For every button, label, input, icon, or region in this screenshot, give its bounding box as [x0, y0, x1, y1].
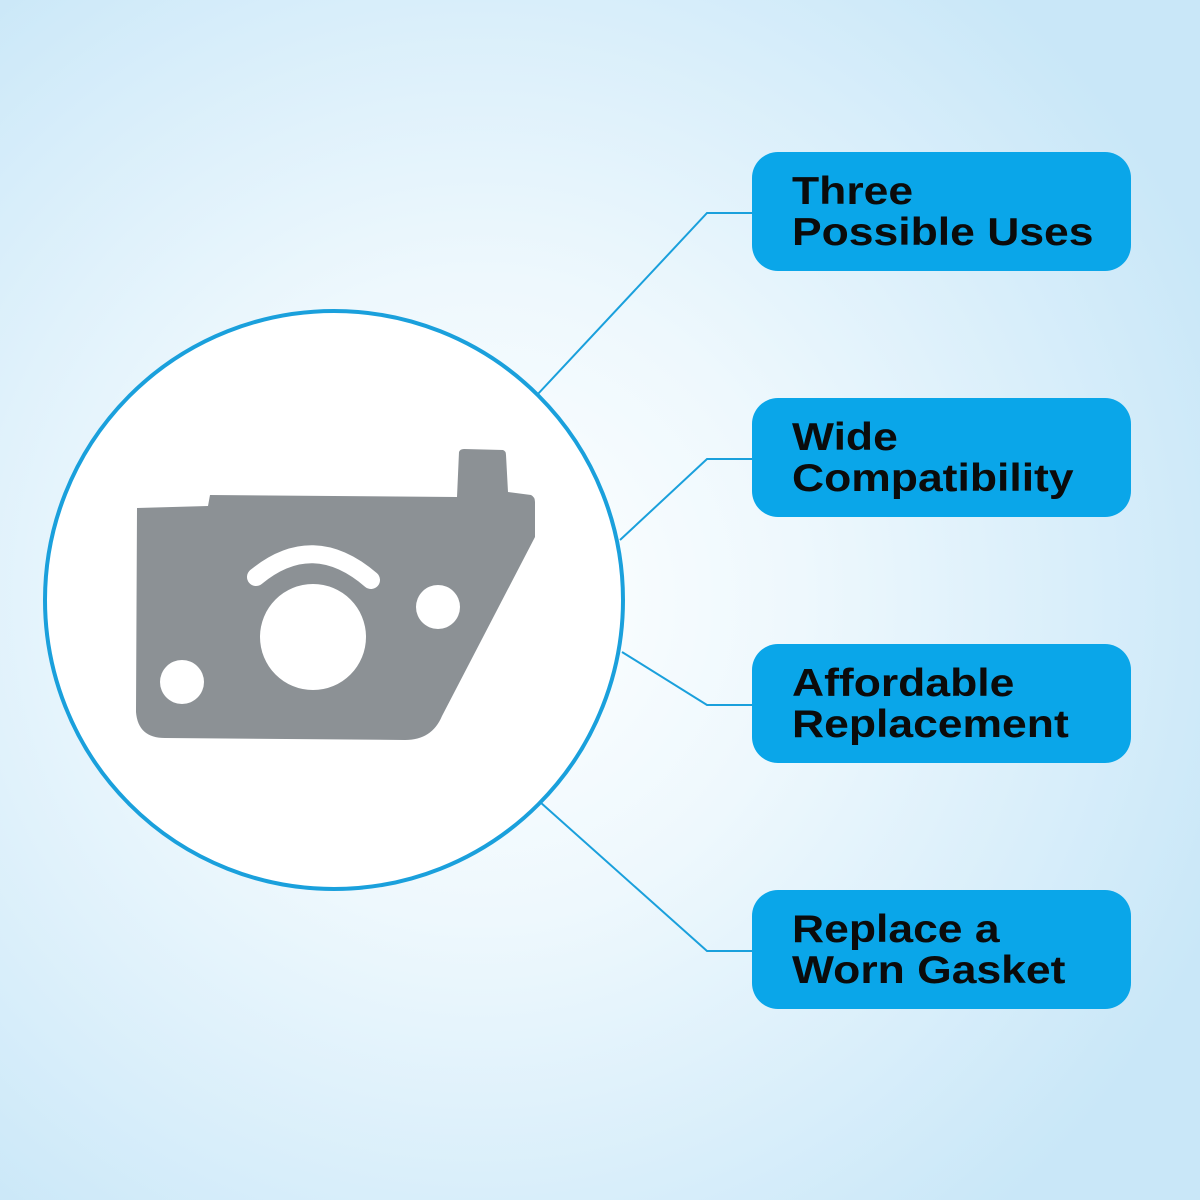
- box: replace a worn gasket: Replace a: [792, 908, 1000, 951]
- box: three possible uses: Possible Uses: [792, 211, 1093, 254]
- box: three possible uses: Three: [792, 170, 913, 213]
- box: affordable replacement: Replacement: [792, 703, 1069, 746]
- box: wide compatibility: [752, 398, 1131, 517]
- box: replace a worn gasket: [752, 890, 1131, 1009]
- gasket image: [136, 449, 535, 740]
- box: wide compatibility: Wide: [792, 416, 898, 459]
- box: affordable replacement: [752, 644, 1131, 763]
- box: replace a worn gasket: Worn Gasket: [792, 949, 1065, 992]
- box: three possible uses: [752, 152, 1131, 271]
- box: affordable replacement: Affordable: [792, 662, 1014, 705]
- connector lines: [537, 213, 752, 951]
- product circle: [45, 311, 623, 889]
- box: wide compatibility: Compatibility: [792, 457, 1074, 500]
